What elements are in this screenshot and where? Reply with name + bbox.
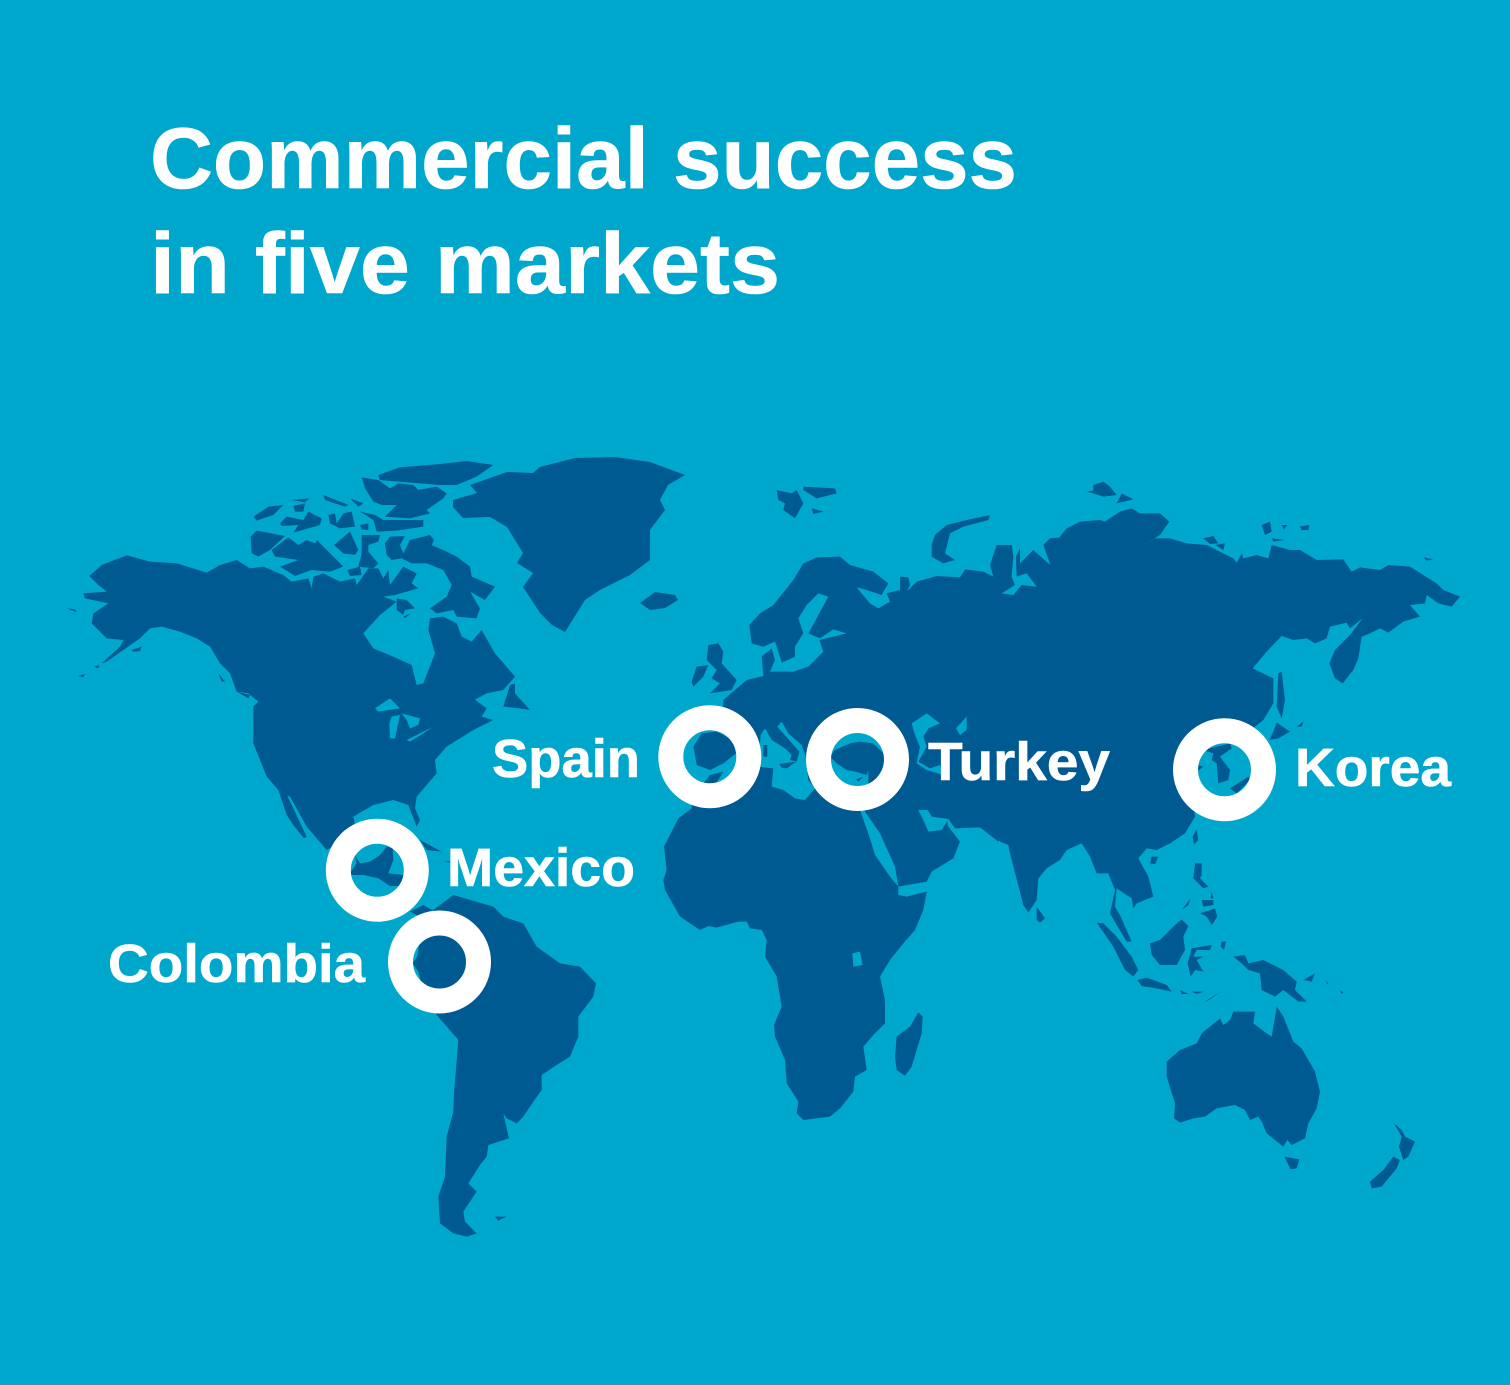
title: Commercial success [150,111,1017,207]
South and Central America [410,840,596,1237]
Great Lakes [375,698,433,742]
South and Southeast Asia, Australia, Oceania [1000,800,1415,1188]
marker: Korea [1186,731,1264,809]
Russia and East Asia [1060,482,1460,803]
Greenland [453,457,685,632]
world map [67,457,1460,1237]
North America [67,555,530,850]
Africa and Middle East [663,777,1002,1120]
Iceland [640,592,678,610]
label: Spain: Spain [492,729,640,789]
label: Turkey: Turkey [928,732,1110,792]
Mediterranean, Caspian and Aral seas [758,713,967,800]
marker: Mexico [338,831,416,909]
Canadian Arctic islands [251,461,495,618]
Europe and northern Asia west [692,487,1080,810]
title: in five markets [150,216,780,312]
label: Colombia: Colombia [108,934,366,994]
marker: Colombia [400,923,478,1001]
marker: Turkey [818,720,896,798]
marker: Spain [671,718,749,796]
title [150,111,1017,312]
label: Korea: Korea [1295,738,1452,798]
label: Mexico: Mexico [447,838,635,898]
